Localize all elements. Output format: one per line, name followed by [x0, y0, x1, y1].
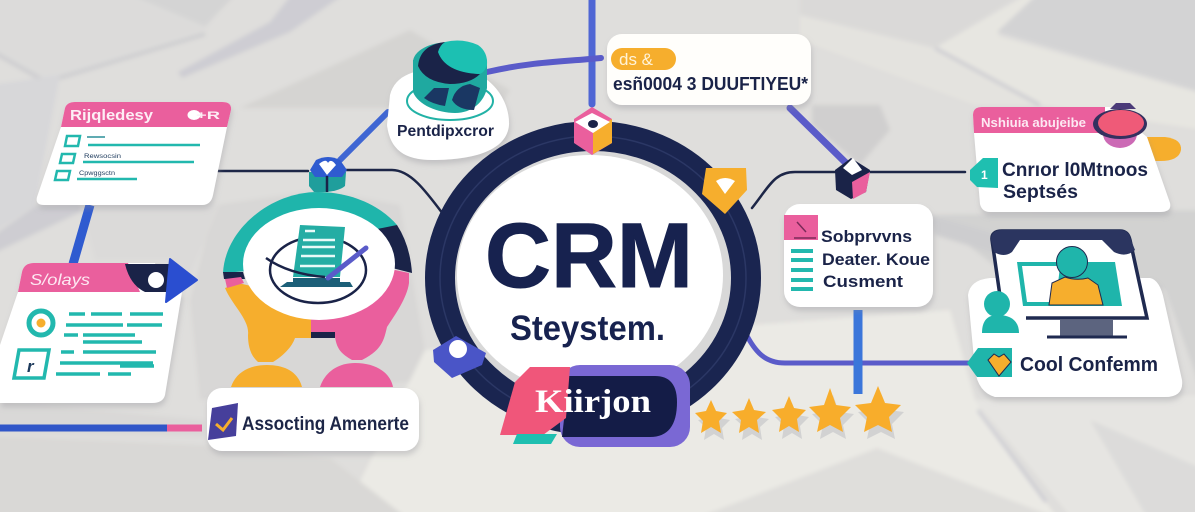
- panel: summary card: [784, 204, 933, 307]
- icon: teal lines: [791, 251, 813, 289]
- inner rim: [453, 150, 733, 406]
- icon: document square: [14, 350, 49, 378]
- icon: blue node: [433, 336, 486, 378]
- icon: laptop and document: [266, 225, 366, 303]
- orange base: [231, 365, 302, 387]
- assessment text: Assocting Amenerte: [242, 414, 409, 435]
- icon: heart node: [309, 157, 347, 192]
- panel: profile card: [0, 259, 197, 403]
- top card text: esñ0004 3 DUUFTIYEU*: [613, 74, 808, 94]
- panel: checklist card: [37, 102, 231, 205]
- orange figure: [225, 283, 312, 362]
- checklist rows: [55, 136, 200, 180]
- orange tag: ds &: [619, 50, 654, 69]
- notification header: [973, 107, 1105, 133]
- summary text: [821, 227, 930, 291]
- white disc: [457, 155, 723, 395]
- panel: notification card: Nshiuia abujeibe: [981, 115, 1086, 130]
- icon: teal cylinder: [407, 41, 493, 120]
- system subtitle: Steystem.: [510, 309, 665, 348]
- icon: checkmark badge: [208, 403, 238, 440]
- connector lines: [0, 0, 975, 428]
- navy ring segment: [372, 225, 412, 273]
- notification text: Cnrıor l0Mtnoos: [1002, 160, 1148, 181]
- badge: Kiirjon: [500, 365, 690, 447]
- navy ring: [440, 136, 746, 420]
- star shadows: [698, 393, 904, 440]
- notification text: [1002, 160, 1148, 203]
- icon: target: [29, 311, 53, 335]
- icon: monitor: [991, 230, 1147, 337]
- notification text: Septsés: [1003, 182, 1078, 203]
- panel: persona ring illustration: [223, 157, 412, 387]
- icon: teal tag: 1: [981, 168, 988, 182]
- central CRM ring: [433, 107, 747, 420]
- icon: teal tag: [970, 158, 998, 188]
- panel: notification card: [970, 103, 1181, 212]
- checklist rows: Rewsocsin: [84, 154, 121, 160]
- profile heading: S/olays: [30, 272, 90, 289]
- icon: toggle dot: [148, 272, 164, 288]
- left ring caps: [223, 272, 245, 288]
- icon: teal heart badge: [967, 348, 1012, 377]
- icon: pink square: [784, 215, 818, 240]
- rating stars: [695, 386, 901, 433]
- perspector label: Pentdipxcror: [397, 123, 494, 140]
- checklist header badge: +R: [196, 110, 220, 122]
- panel: contact card: [967, 230, 1182, 397]
- arrow: blue play: [166, 259, 197, 302]
- ring center disc: [243, 208, 395, 320]
- summary text: Sobprvvns: [821, 227, 912, 246]
- icon: hexagon eye node: [574, 107, 612, 155]
- icon: orange shield: [702, 168, 747, 214]
- icon: person: [982, 291, 1019, 333]
- text lines: [56, 314, 163, 374]
- teal ring segment: [223, 192, 397, 273]
- CRM title: CRM: [485, 205, 693, 307]
- profile card header: [18, 263, 140, 292]
- pink figure: [311, 270, 409, 360]
- panel: perspector bubble: [387, 41, 509, 160]
- contact text: Cool Confemm: [1020, 354, 1158, 376]
- icon: document square: r: [27, 357, 35, 376]
- summary text: Deater. Koue: [822, 250, 930, 269]
- badge text: Kiirjon: [535, 384, 651, 420]
- panel: assessment label: [207, 388, 419, 451]
- checklist card header: [61, 102, 231, 127]
- checklist heading: Rijqledesy: [70, 107, 154, 124]
- orange tag: [611, 48, 676, 70]
- pink base: [320, 363, 393, 387]
- checklist header badge: [188, 110, 220, 122]
- icon: orange tab: [1145, 137, 1181, 161]
- checklist rows: Cpwggsctn: [79, 171, 115, 177]
- panel: top data card: [607, 34, 811, 105]
- summary text: Cusment: [823, 272, 903, 291]
- icon: navy cube node: [835, 158, 870, 199]
- icon: pink bowl: [1093, 103, 1147, 148]
